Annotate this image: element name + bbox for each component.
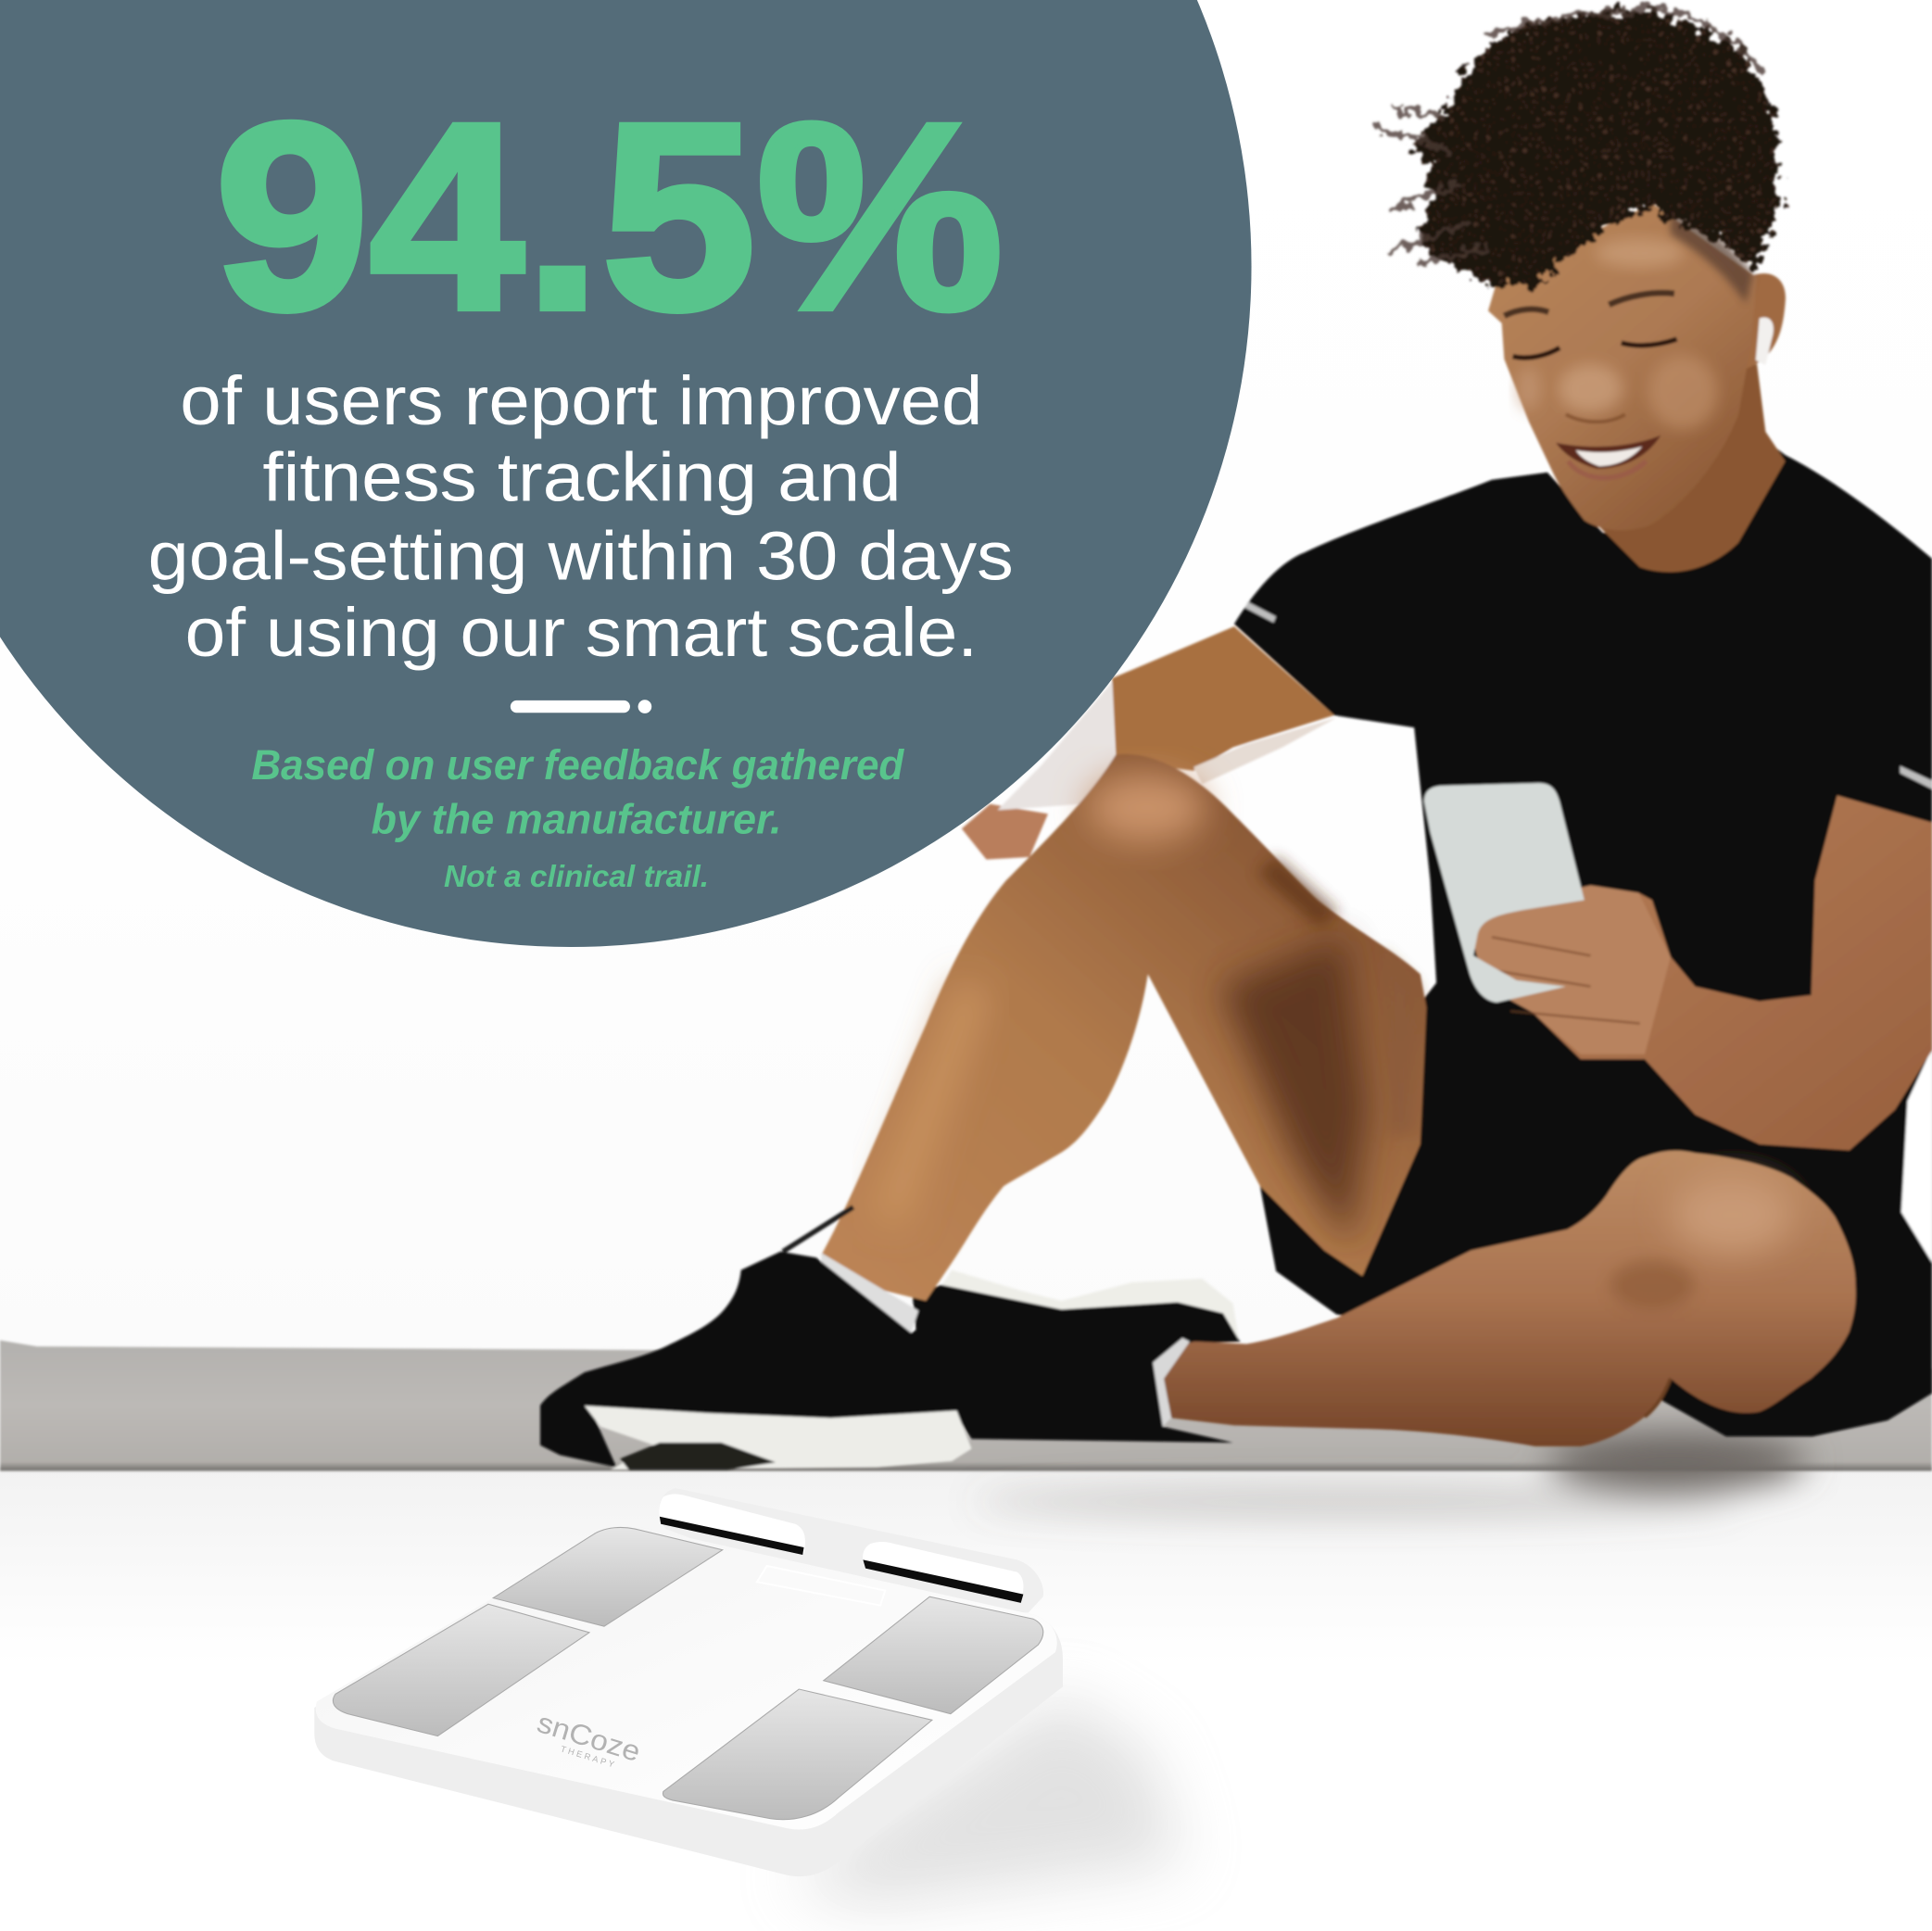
description text: goal-setting within 30 days (148, 518, 1014, 595)
neck (1566, 364, 1786, 572)
lower leg and ankle (1153, 1151, 1856, 1446)
rear shoe (913, 1270, 1241, 1443)
arm resting on knee (962, 626, 1336, 860)
sleeve stripes (1245, 601, 1932, 789)
scale shadow (789, 1696, 1183, 1905)
source note: Based on user feedback gathered (251, 741, 905, 789)
circle background (0, 0, 1252, 947)
right arm and hand (1473, 795, 1932, 1151)
scale logo: THERAPY (560, 1744, 618, 1770)
handle slots (659, 1494, 1023, 1603)
big percentage: 94.5% (215, 68, 1004, 365)
raised leg (821, 754, 1426, 1301)
scale base (314, 1527, 1063, 1876)
divider bar and dot (511, 700, 651, 713)
scale top plate (316, 1527, 1057, 1829)
description text (148, 362, 1014, 671)
phone (1424, 783, 1585, 1003)
hair (1375, 7, 1779, 303)
stat circle panel (0, 0, 1252, 947)
description text: of using our smart scale. (185, 594, 978, 671)
smart scale product (314, 1488, 1183, 1905)
white gap beside elbow (1901, 1048, 1932, 1263)
description text: of users report improved (180, 362, 982, 439)
source note: by the manufacturer. (372, 796, 782, 843)
ear (1746, 273, 1786, 369)
scale logo: snCoze (534, 1707, 644, 1768)
sock (821, 1253, 918, 1333)
photo: seated man with phone (540, 7, 1932, 1470)
front shoe (540, 1207, 971, 1470)
handle frame (659, 1488, 1043, 1613)
source note: Not a clinical trail. (444, 860, 709, 894)
description text: fitness tracking and (262, 438, 902, 515)
shirt and shorts (1234, 435, 1932, 1436)
floor shadow under person (974, 1432, 1806, 1519)
foot pads (333, 1527, 1043, 1820)
exercise mat (0, 1340, 1932, 1471)
source note (251, 741, 905, 894)
scale display digits (757, 1566, 885, 1606)
face (1488, 204, 1774, 530)
